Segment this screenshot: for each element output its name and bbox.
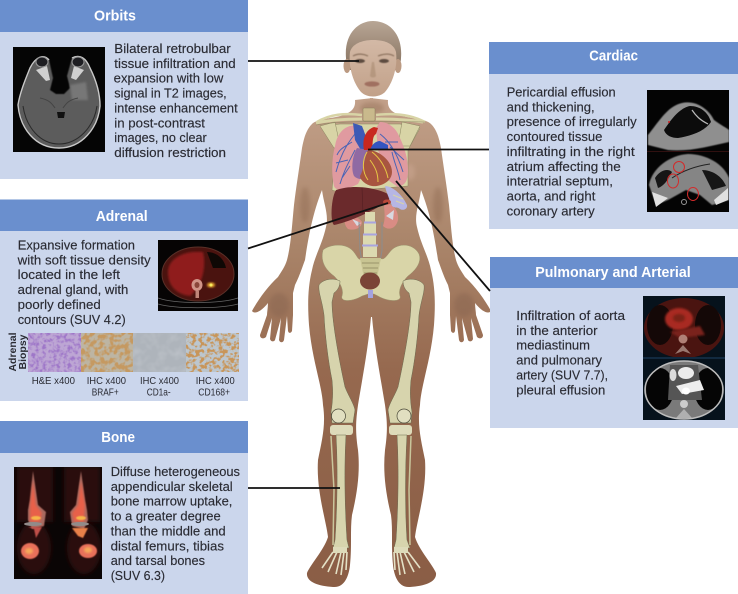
image: H&E histology: [28, 333, 81, 372]
text: adrenal findings: located in the left: [18, 267, 120, 282]
text: bone findings: and tarsal bones: [111, 553, 205, 568]
text: cardiac findings: infiltrating in the right: [507, 144, 635, 159]
text: cardiac findings: and thickening,: [507, 99, 595, 114]
text: cardiac findings: presence of irregularly: [507, 114, 637, 129]
text: bone findings: [111, 464, 240, 583]
stomach and diaphragm structure: [383, 186, 407, 210]
left leg bones: [319, 279, 355, 548]
text: orbits findings: signal in T2 images,: [114, 86, 227, 101]
labels: biopsy stains: [32, 375, 235, 398]
text: adrenal findings: contours (SUV 4.2): [18, 312, 126, 327]
text: orbits findings: diffusion restriction: [114, 145, 226, 160]
heading: adrenal: [0, 200, 248, 231]
connector: cardiac to heart: [368, 148, 489, 150]
text: adrenal findings: Expansive formation: [18, 238, 135, 252]
image: CD168 staining: [186, 333, 239, 372]
text: bone findings: bone marrow uptake,: [111, 494, 232, 509]
image: CD1a staining: [133, 333, 186, 372]
text: adrenal findings: with soft tissue density: [17, 252, 151, 267]
text: orbits findings: expansion with low: [114, 71, 224, 86]
text: pulmonary findings: artery (SUV 7.7),: [516, 367, 608, 382]
text: orbits findings: tissue infiltration and: [114, 56, 236, 71]
text: adrenal findings: adrenal gland, with: [18, 282, 128, 297]
text: bone findings: Diffuse heterogeneous: [111, 464, 240, 479]
text: cardiac findings: interatrial septum,: [507, 174, 613, 189]
text: adrenal findings: [17, 238, 151, 327]
labels: biopsy stains: IHC x400: [140, 375, 179, 387]
thoracic skeleton: [316, 108, 425, 192]
text: cardiac findings: [507, 84, 637, 218]
heading: pulmonary and arterial: [490, 257, 738, 288]
text: pulmonary findings: in the anterior: [516, 323, 598, 338]
pelvis: [322, 245, 420, 300]
text: orbits findings: images, no clear: [114, 130, 207, 145]
head with hair and face: [344, 21, 402, 96]
text: pulmonary findings: Infiltration of aorta: [516, 308, 626, 323]
text: pulmonary findings: and pulmonary: [516, 353, 602, 368]
heading: adrenal: Adrenal: [96, 208, 148, 225]
heading: cardiac: Cardiac: [589, 48, 638, 64]
text: cardiac findings: coronary artery: [507, 203, 595, 218]
right leg bones: [388, 279, 424, 548]
heading: cardiac: [489, 42, 738, 74]
label: adrenal biopsy: [7, 332, 29, 372]
labels: biopsy stains: H&E x400: [32, 375, 75, 387]
connector: adrenal to gland: [248, 203, 388, 248]
bladder: [360, 272, 380, 298]
text: pulmonary findings: [516, 308, 626, 397]
text: bone findings: to a greater degree: [111, 509, 221, 524]
connector: orbits to eye: [248, 60, 359, 62]
panel: orbits: [0, 0, 248, 179]
kidneys: [345, 204, 398, 230]
heading: orbits: Orbits: [94, 8, 136, 24]
heading: bone: [0, 421, 248, 453]
text: cardiac findings: atrium affecting the: [507, 159, 621, 174]
body silhouette: [252, 98, 491, 587]
text: orbits findings: in post-contrast: [114, 115, 205, 130]
liver: [332, 187, 390, 225]
text: orbits findings: intense enhancement: [114, 100, 238, 115]
label: adrenal biopsy: Adrenal: [7, 332, 19, 372]
text: adrenal findings: poorly defined: [18, 297, 101, 312]
human figure: [252, 21, 491, 587]
panel: cardiac: [489, 42, 738, 229]
image: PET-CT and CT of chest: [643, 296, 725, 420]
image: bone PET scan: [14, 467, 102, 579]
panel: pulmonary and arterial: [490, 257, 738, 428]
text: bone findings: (SUV 6.3): [111, 568, 165, 583]
labels: biopsy stains: CD1a-: [147, 386, 171, 398]
text: bone findings: than the middle and: [111, 523, 226, 538]
heading: orbits: [0, 0, 248, 32]
connector: bone to tibia: [248, 487, 340, 489]
right foot bones: [394, 547, 420, 575]
labels: biopsy stains: IHC x400: [196, 375, 235, 387]
text: bone findings: distal femurs, tibias: [111, 538, 225, 553]
connector: pulmonary to lung: [396, 181, 490, 291]
image: adrenal PET-CT: [158, 240, 238, 311]
panel: bone: [0, 421, 248, 594]
image: echocardiogram and cardiac MRI: [647, 90, 729, 212]
lungs: [332, 122, 408, 190]
label: adrenal biopsy: Biopsy: [17, 334, 29, 370]
image: orbit MRI: [13, 47, 105, 152]
heading: pulmonary and arterial: Pulmonary and Arterial: [535, 264, 691, 281]
heading: bone: Bone: [101, 429, 135, 446]
labels: biopsy stains: CD168+: [198, 386, 230, 398]
text: orbits findings: Bilateral retrobulbar: [114, 41, 231, 56]
panel: adrenal: [0, 200, 248, 401]
lumbar spine: [359, 212, 382, 262]
text: cardiac findings: Pericardial effusion: [507, 84, 616, 100]
image: BRAF staining: [81, 333, 133, 372]
text: orbits findings: [114, 41, 238, 160]
left foot bones: [322, 547, 347, 575]
labels: biopsy stains: BRAF+: [92, 386, 119, 398]
heart and great vessels: [352, 123, 392, 186]
text: cardiac findings: contoured tissue: [507, 129, 602, 144]
labels: biopsy stains: IHC x400: [87, 375, 126, 387]
text: pulmonary findings: pleural effusion: [516, 382, 605, 397]
text: pulmonary findings: mediastinum: [516, 338, 590, 353]
text: bone findings: appendicular skeletal: [111, 479, 233, 494]
text: cardiac findings: aorta, and right: [507, 188, 596, 204]
